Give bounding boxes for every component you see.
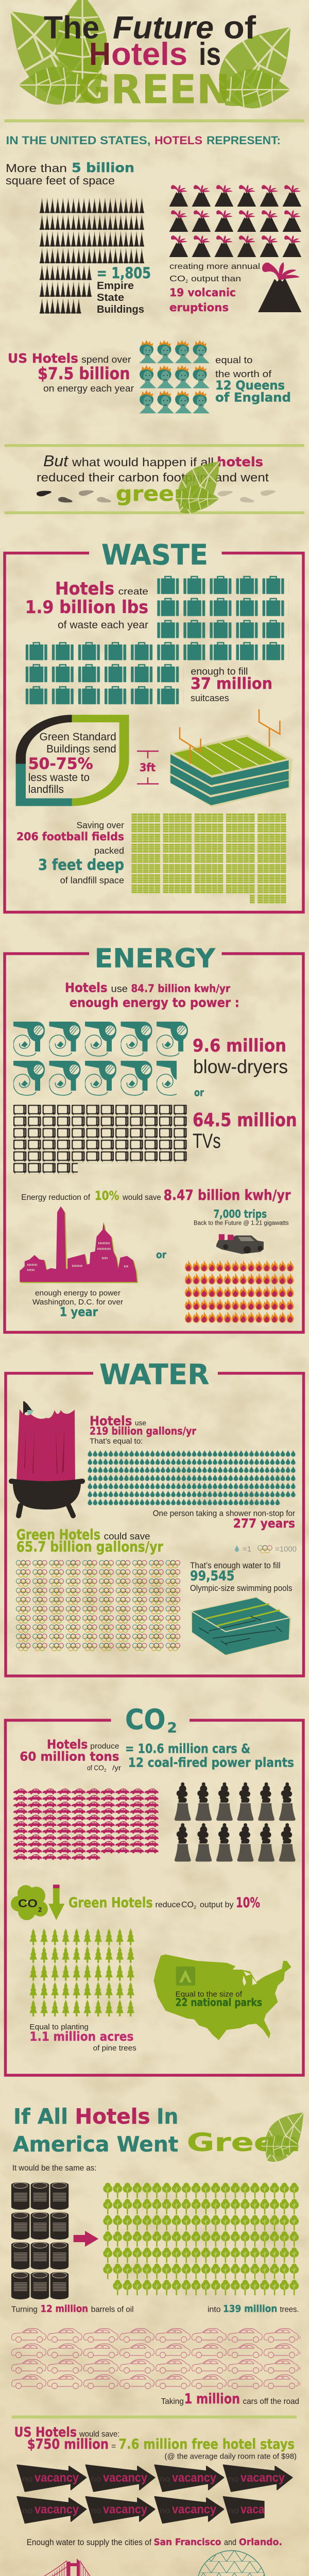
- pictogram: no vacancy signs: no: [22, 2474, 33, 2484]
- pictogram: outline cars: [11, 2328, 300, 2390]
- text: 5 billion square feet: square feet of space: [6, 174, 115, 187]
- illustration: epcot globe: [198, 2550, 265, 2576]
- text: 1,805 empire state buildings: [97, 264, 151, 315]
- text: hotels would save: US Hotels: [14, 2425, 77, 2440]
- text: green hotels save: could save: [104, 1531, 150, 1541]
- pictogram: no vacancy signs: no: [91, 2474, 101, 2484]
- pictogram: pine trees: [29, 1928, 138, 2018]
- text: 5 billion square feet: 5 billion: [72, 160, 134, 175]
- text: 219 billion gallons: Hotels: [90, 1414, 132, 1429]
- text: 60 million tons: [20, 1737, 121, 1773]
- pictogram: no vacancy signs: vacancy: [172, 2503, 217, 2516]
- illustration: us map with national parks: Equal to the size of: [176, 1990, 243, 1999]
- legend: =1: [243, 1546, 251, 1554]
- callout: what if hotels went green: [4, 444, 304, 522]
- pictogram: no vacancy signs: no: [228, 2506, 239, 2515]
- marker: 3ft depth: [137, 751, 159, 784]
- text: barrels into trees: into: [208, 2305, 221, 2314]
- pictogram: flames: [185, 1260, 295, 1324]
- icon: co2 cloud: [11, 1885, 48, 1920]
- panel frame: [6, 1374, 304, 1676]
- pictogram: no vacancy signs: vacancy: [241, 2471, 285, 2485]
- panel frame: [5, 553, 303, 912]
- text: 206 football fields: Saving over: [76, 820, 124, 831]
- text: hotels would save: would save:: [79, 2430, 119, 2438]
- text: hotels would save: (@ the average daily room rate of $98): [165, 2453, 297, 2461]
- heading: If All: [13, 2104, 68, 2129]
- text: 206 football fields: 206 football fields: [16, 831, 124, 843]
- text: 64.5 million TVs: [193, 1110, 297, 1153]
- heading: Green: [187, 2128, 301, 2157]
- marker: 3ft depth: 3ft: [140, 761, 156, 774]
- text: power washington: or: [156, 1249, 167, 1261]
- text: 1,805 empire state buildings: Buildings: [97, 304, 144, 315]
- callout: green standard buildings: landfills: [28, 784, 64, 795]
- icon: footprints: [37, 490, 276, 502]
- heading: HOTELS: [154, 134, 202, 147]
- text: energy spend: US Hotels: [8, 351, 78, 366]
- divider rule: [4, 120, 304, 123]
- text: 37 million suitcases: enough to fill: [191, 667, 248, 677]
- text: 1.1 million acres: 1.1 million acres: [29, 2029, 133, 2044]
- heading: waste: WASTE: [101, 539, 208, 571]
- icon: down arrow: [48, 1885, 65, 1920]
- panel: waste: [5, 539, 303, 912]
- pictogram: no vacancy signs: vacancy: [35, 2503, 79, 2516]
- text: reduce co2 10%: output by: [200, 1901, 234, 1909]
- illustration: leaves behind title: [10, 0, 296, 126]
- text: cars and power plants: = 10.6 million cars &: [125, 1741, 250, 1756]
- pictogram: volcanoes: [169, 184, 305, 260]
- text: barrels into trees: [11, 2303, 299, 2314]
- text: 7,000 trips: [194, 1208, 289, 1227]
- text: cars and power plants: [125, 1741, 294, 1770]
- text: 206 football fields: [16, 820, 124, 885]
- heading: water: WATER: [99, 1358, 209, 1391]
- title: H: [89, 37, 111, 72]
- text: 206 football fields: of landfill space: [60, 875, 124, 885]
- text: 219 billion gallons: [90, 1414, 196, 1446]
- text: energy reduction: 10%: [95, 1189, 119, 1203]
- text: energy spend: spend over: [81, 354, 131, 365]
- callout: what if hotels went green: reduced their carbon footprint and went: [37, 471, 269, 484]
- text: green hotels save: 65.7 billion gallons/yr: [16, 1538, 163, 1555]
- text: 37 million suitcases: [191, 667, 272, 703]
- pictogram: trees: [103, 2183, 299, 2296]
- callout: green standard buildings: Green Standard: [39, 731, 116, 743]
- panel frame: [5, 954, 303, 1332]
- text: 1.9 billion lbs: create: [118, 586, 148, 597]
- icon: co2 cloud: CO: [18, 1897, 38, 1910]
- heading: Hotels: [75, 2104, 150, 2129]
- panel: co2: [5, 1703, 303, 2075]
- heading: [13, 2104, 301, 2157]
- pictogram: no vacancy signs: vacancy: [103, 2503, 148, 2516]
- title: GREEN: [78, 67, 230, 113]
- callout: what if hotels went green: what would happen if all: [72, 455, 214, 469]
- text: 99,545 pools: 99,545: [190, 1569, 234, 1584]
- pictogram: no vacancy signs: no: [228, 2474, 239, 2484]
- heading: IN THE UNITED STATES,: [6, 134, 150, 147]
- text: 60 million tons: produce: [90, 1742, 119, 1751]
- text: energy use: 84.7 billion kwh/yr: [131, 982, 230, 995]
- text: 99,545 pools: That’s enough water to fill: [190, 1561, 281, 1570]
- text: 12 queens of england: equal to: [215, 355, 252, 365]
- text: 60 million tons: 2: [104, 1768, 107, 1773]
- panel frame: [5, 1720, 303, 2075]
- heading: co2: CO: [125, 1703, 166, 1736]
- title: is: [199, 37, 221, 72]
- text: 1,805 empire state buildings: = 1,805: [97, 264, 151, 282]
- pictogram: televisions: [13, 1105, 188, 1175]
- divider rule: [12, 2415, 297, 2418]
- title: otels: [111, 37, 187, 72]
- pictogram: olympic rings: [16, 1560, 182, 1652]
- text: reduce co2 10%: 2: [194, 1905, 196, 1910]
- heading: co2: 2: [167, 1720, 177, 1736]
- text: 277 years: 277 years: [233, 1516, 295, 1531]
- callout: what if hotels went green: green?: [116, 482, 203, 506]
- text: energy use: use: [111, 984, 128, 995]
- text: hotels would save: =: [111, 2442, 116, 2451]
- text: 206 football fields: packed: [94, 845, 124, 856]
- callout: what if hotels went green: But: [43, 452, 68, 470]
- text: 60 million tons: O: [98, 1764, 104, 1772]
- text: volcanic eruptions: output than: [191, 275, 241, 283]
- text: power washington: 1 year: [60, 1304, 98, 1319]
- heading: [6, 134, 281, 147]
- pictogram: blow-dryers: [13, 1022, 193, 1097]
- pictogram: oil barrels: [11, 2181, 70, 2300]
- text: volcanic eruptions: 2: [185, 279, 188, 284]
- title: Future: [113, 10, 214, 45]
- heading: America Went: [13, 2132, 178, 2157]
- text: 1.9 billion lbs: [25, 579, 148, 631]
- section: hotels represent: [6, 134, 305, 415]
- text: water supply: Orlando.: [239, 2537, 282, 2548]
- section: hotel savings: [14, 2425, 297, 2576]
- text: 1 million cars: cars off the road: [243, 2397, 299, 2406]
- callout: green standard buildings: [16, 715, 129, 806]
- text: 99,545 pools: [190, 1561, 293, 1593]
- icon: large volcano: [258, 262, 302, 312]
- text: barrels into trees: barrels of oil: [91, 2305, 134, 2314]
- text: energy spend: $7.5 billion: [38, 364, 130, 383]
- text: volcanic eruptions: 19 volcanic: [169, 286, 236, 299]
- text: 1 million cars: 1 million: [184, 2391, 240, 2407]
- text: water supply: Enough water to supply the cities of: [27, 2538, 151, 2547]
- text: 277 years: One person taking a shower non-stop for: [153, 1509, 296, 1518]
- heading: energy: ENERGY: [95, 943, 216, 974]
- pictogram: football fields: [131, 814, 289, 905]
- text: reduce co2 10%: [68, 1895, 260, 1911]
- text: 9.6 million blow-dryers: 9.6 million: [193, 1036, 286, 1056]
- text: reduce co2 10%: reduce: [156, 1901, 181, 1909]
- text: 277 years: [153, 1509, 296, 1531]
- legend: =1000: [275, 1546, 297, 1554]
- pictogram: no vacancy signs: no: [91, 2506, 101, 2515]
- text: 219 billion gallons: use: [135, 1419, 146, 1427]
- heading: REPRESENT:: [207, 134, 281, 147]
- text: 1,805 empire state buildings: Empire: [97, 280, 134, 292]
- text: 5 billion square feet: [6, 160, 134, 187]
- pictogram: no vacancy signs: [17, 2465, 293, 2523]
- text: water supply: and: [224, 2538, 236, 2547]
- text: 1,805 empire state buildings: State: [97, 292, 124, 303]
- callout: green standard buildings: Buildings send: [46, 743, 116, 755]
- text: 12 queens of england: 12 Queens: [215, 378, 285, 393]
- text: 9.6 million blow-dryers: [193, 1036, 288, 1098]
- text: volcanic eruptions: eruptions: [169, 301, 229, 314]
- text: hotels would save: [14, 2425, 297, 2461]
- pictogram: queens of england: [139, 340, 210, 415]
- section: if all hotels went green: [11, 2104, 304, 2407]
- text: 1 million cars: [161, 2391, 299, 2407]
- illustration: golden gate bridge: [24, 2558, 166, 2576]
- panel: energy: [5, 943, 303, 1332]
- text: 1.1 million acres: Equal to planting: [29, 2023, 89, 2031]
- text: 60 million tons: of C: [87, 1764, 98, 1772]
- text: barrels into trees: 12 million: [40, 2303, 88, 2314]
- text: reduce co2 10%: 10%: [236, 1895, 260, 1911]
- pictogram: no vacancy signs: no: [22, 2506, 33, 2515]
- pictogram: suitcases: [26, 576, 289, 708]
- pictogram: no vacancy signs: no: [160, 2474, 170, 2484]
- illustration: washington dc skyline: [20, 1206, 138, 1283]
- text: hotels would save: $750 million: [27, 2436, 109, 2452]
- pictogram: no vacancy signs: vacancy: [103, 2471, 148, 2485]
- pictogram: cars: [13, 1788, 159, 1861]
- text: barrels into trees: trees.: [280, 2305, 299, 2314]
- pictogram: water drops: [88, 1450, 296, 1506]
- illustration: us map with national parks: 22 national parks: [176, 1996, 262, 2008]
- text: 1.1 million acres: [29, 2023, 136, 2053]
- text: 219 billion gallons: 219 billion gallons/yr: [90, 1425, 196, 1437]
- text: volcanic eruptions: [169, 262, 260, 314]
- text: 12 queens of england: the worth of: [215, 369, 272, 379]
- text: 7,000 trips: 7,000 trips: [213, 1208, 267, 1220]
- callout: what if hotels went green: hotels: [217, 454, 263, 469]
- title: The: [44, 10, 99, 45]
- text: 60 million tons: /yr: [112, 1764, 121, 1772]
- title: of: [224, 10, 256, 45]
- text: 9.6 million blow-dryers: blow-dryers: [193, 1056, 288, 1077]
- text: barrels into trees: 139 million: [223, 2303, 277, 2314]
- pictogram: no vacancy signs: vacancy: [35, 2471, 79, 2485]
- text: energy use: enough energy to power :: [70, 995, 239, 1010]
- illustration: stacked football field: [169, 709, 293, 807]
- arrow: [74, 2231, 98, 2247]
- legend: [235, 1545, 297, 1554]
- icon: delorean: [216, 1234, 264, 1254]
- text: reduce co2 10%: Green Hotels: [68, 1895, 153, 1911]
- illustration: swimming pool: [191, 1597, 291, 1656]
- text: 12 queens of england: [215, 355, 291, 405]
- text: volcanic eruptions: creating more annual: [169, 262, 260, 271]
- header: [10, 0, 296, 126]
- text: 1.1 million acres: of pine trees: [93, 2044, 136, 2053]
- pictogram: coal power plants: [175, 1782, 300, 1864]
- text: 1.9 billion lbs: Hotels: [55, 579, 114, 599]
- text: 1 million cars: Taking: [161, 2397, 184, 2406]
- illustration: bathtub and curtain: [11, 1401, 82, 1516]
- text: energy reduction: would save: [122, 1193, 161, 1202]
- text: energy spend: on energy each year: [43, 383, 134, 394]
- panel: water: [6, 1358, 304, 1676]
- text: energy reduction: Energy reduction of: [21, 1193, 91, 1202]
- icon: leaf: [174, 462, 220, 522]
- text: 37 million suitcases: 37 million: [191, 675, 272, 693]
- text: 206 football fields: 3 feet deep: [38, 856, 124, 874]
- text: energy use: [65, 980, 239, 1010]
- text: water supply: San Francisco: [153, 2537, 221, 2548]
- text: power washington: [32, 1249, 167, 1319]
- callout: green standard buildings: 50-75%: [28, 755, 93, 773]
- text: barrels into trees: Turning: [11, 2305, 38, 2314]
- text: 12 queens of england: of England: [215, 391, 291, 405]
- text: 64.5 million TVs: TVs: [193, 1130, 221, 1153]
- text: 37 million suitcases: suitcases: [191, 693, 229, 703]
- text: 60 million tons: 60 million tons: [20, 1750, 119, 1764]
- illustration: us map with national parks: [153, 1955, 291, 2040]
- title: [44, 10, 256, 113]
- text: green hotels save: Green Hotels: [16, 1526, 100, 1543]
- pictogram: no vacancy signs: vaca: [241, 2503, 265, 2516]
- text: 1.9 billion lbs: of waste each year: [58, 620, 148, 631]
- text: water supply: [27, 2537, 282, 2548]
- pictogram: empire state buildings: [39, 198, 144, 315]
- text: volcanic eruptions: CO: [169, 275, 185, 283]
- text: energy reduction: [21, 1187, 291, 1204]
- pictogram: no vacancy signs: vacancy: [172, 2471, 217, 2485]
- text: 5 billion square feet: More than: [6, 162, 67, 175]
- icon: co2 cloud: 2: [38, 1906, 42, 1913]
- text: energy use: Hotels: [65, 980, 108, 995]
- callout: green standard buildings: less waste to: [28, 772, 90, 784]
- text: reduce co2 10%: CO: [181, 1901, 194, 1909]
- text: energy spend: [8, 351, 134, 394]
- text: green hotels save: [16, 1526, 163, 1555]
- text: same as: It would be the same as:: [12, 2164, 97, 2173]
- heading: In: [157, 2104, 178, 2129]
- pictogram: no vacancy signs: no: [160, 2506, 170, 2515]
- icon: leaf: [260, 2112, 304, 2166]
- text: 7,000 trips: Back to the Future @ 1.21 gigawatts: [194, 1221, 289, 1227]
- text: power washington: enough energy to power: [35, 1289, 121, 1297]
- text: 9.6 million blow-dryers: or: [194, 1086, 204, 1098]
- text: 99,545 pools: Olympic-size swimming pools: [190, 1583, 293, 1593]
- text: power washington: Washington, D.C. for over: [32, 1298, 123, 1307]
- text: 1.9 billion lbs: 1.9 billion lbs: [25, 597, 148, 618]
- text: 219 billion gallons: That’s equal to:: [90, 1437, 143, 1446]
- text: 60 million tons: Hotels: [47, 1737, 88, 1752]
